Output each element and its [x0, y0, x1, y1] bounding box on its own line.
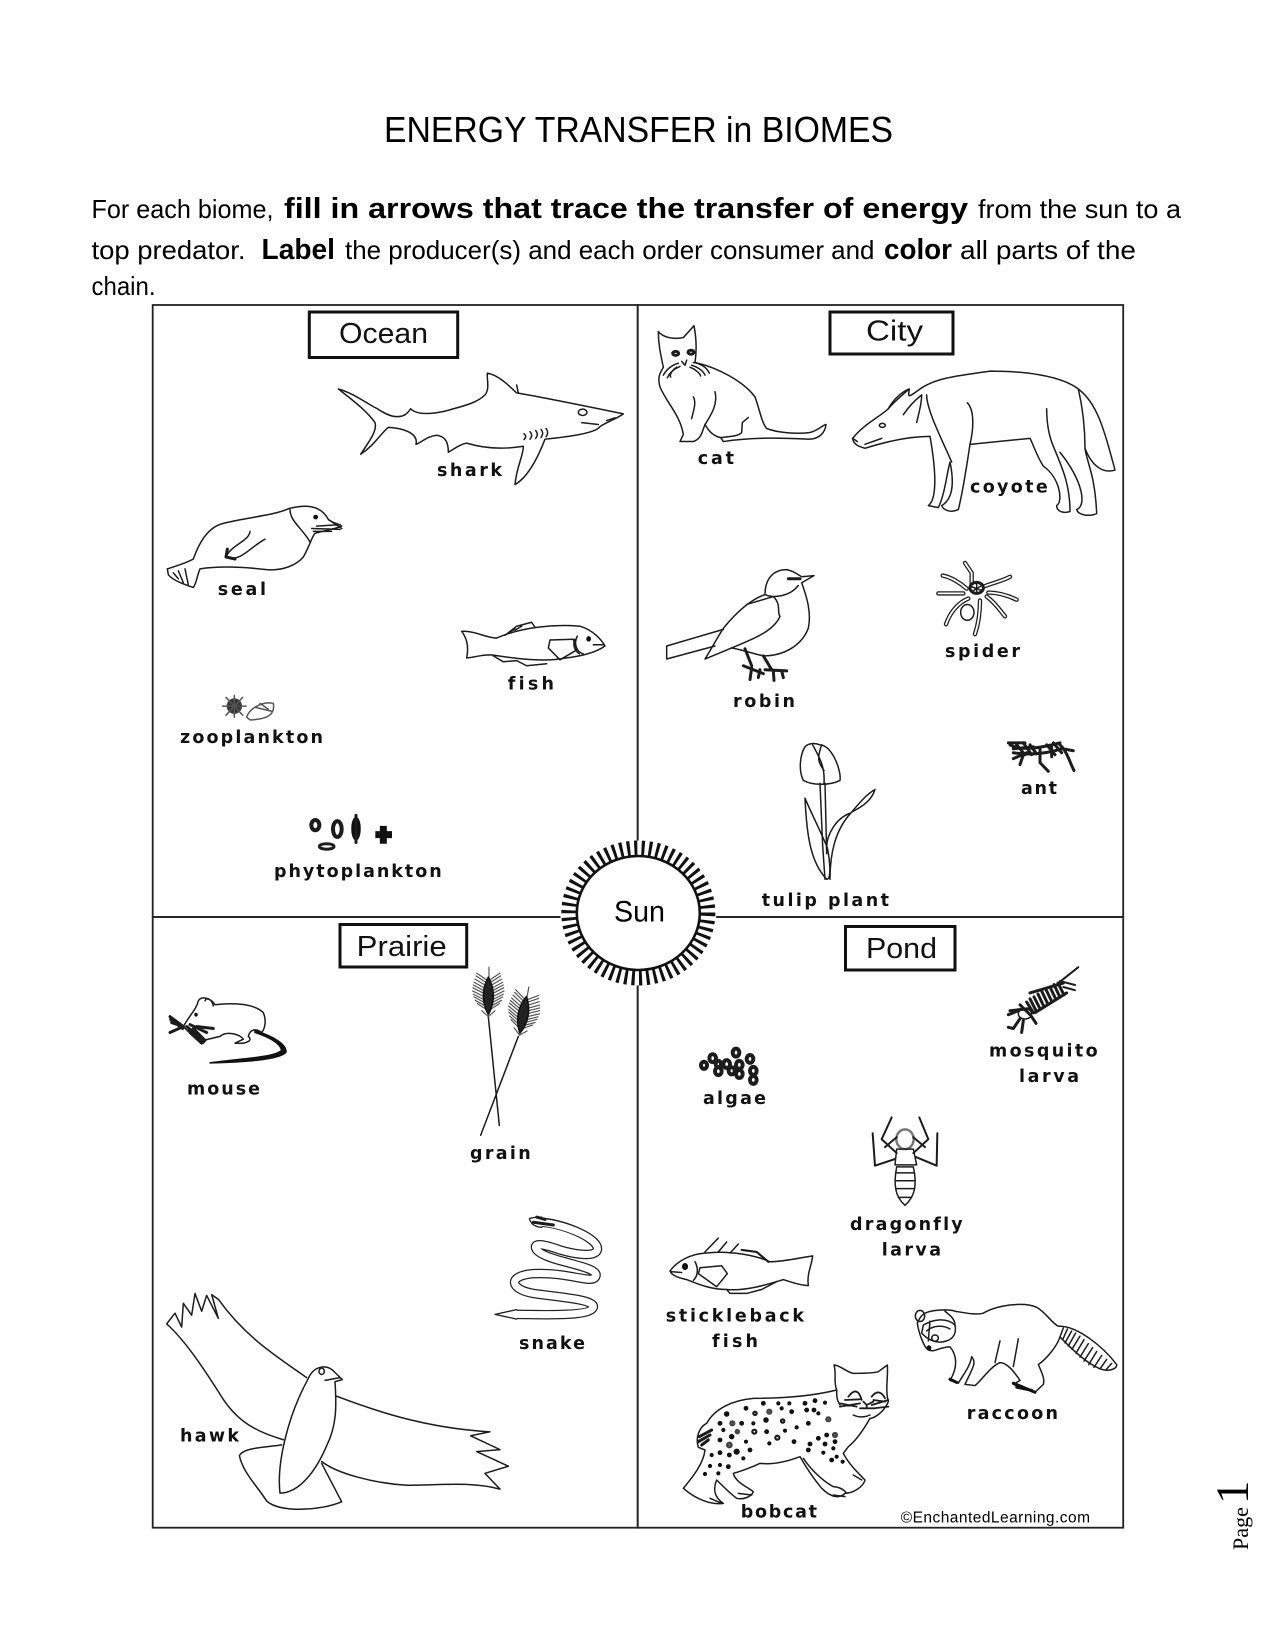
label: hawk: hawk: [180, 1427, 239, 1447]
label: dragonfly larva: larva: [882, 1240, 941, 1260]
icon: robin: [667, 570, 814, 680]
instructions text block: chain.: [92, 271, 156, 301]
icon: sun: Sun: [614, 896, 665, 928]
instructions text block: [92, 193, 1182, 301]
label: stickleback fish: stickleback: [666, 1306, 804, 1326]
icon: bobcat: [683, 1365, 888, 1504]
heading: Prairie: [340, 924, 467, 967]
label: snake: snake: [519, 1334, 585, 1354]
icon: grain: [473, 967, 544, 1135]
label: spider: spider: [945, 642, 1020, 662]
label: dragonfly larva: dragonfly: [850, 1215, 963, 1235]
icon: mosquito larva: [1008, 967, 1078, 1032]
icon: algae: [701, 1049, 757, 1084]
icon: tulip plant: [800, 744, 875, 879]
label: zooplankton: zooplankton: [180, 728, 323, 748]
icon: hawk: [167, 1293, 508, 1509]
heading: Pond: Pond: [866, 933, 937, 965]
label: phytoplankton: phytoplankton: [274, 862, 442, 882]
title: ENERGY TRANSFER in BIOMES: [384, 109, 893, 150]
label: grain: grain: [470, 1144, 531, 1164]
label: mouse: mouse: [187, 1080, 260, 1100]
label: dragonfly larva: [850, 1215, 963, 1260]
label: mosquito larva: mosquito: [989, 1042, 1098, 1062]
panel: ocean: [153, 305, 638, 917]
label: seal: seal: [218, 580, 266, 600]
instructions text block: all parts of the: [960, 235, 1136, 265]
heading: Prairie: Prairie: [357, 931, 447, 963]
label: raccoon: raccoon: [967, 1404, 1058, 1424]
icon: stickleback fish: [670, 1238, 813, 1293]
heading: Pond: [846, 926, 955, 970]
icon: coyote: [853, 371, 1115, 515]
credit: EnchantedLearning.com: ©EnchantedLearning.com: [901, 1510, 1090, 1527]
icon: phytoplankton: [311, 815, 392, 849]
label: ant: ant: [1021, 779, 1057, 799]
label: cat: cat: [698, 449, 734, 469]
icon: seal: [167, 506, 342, 587]
icon: raccoon: [915, 1304, 1117, 1392]
label: robin: robin: [733, 692, 795, 712]
instructions text block: top predator.: [92, 235, 246, 265]
icon: ant: [1008, 743, 1074, 771]
instructions text block: Label: [262, 234, 335, 266]
icon: dragonfly larva: [873, 1117, 937, 1205]
icon: shark: [338, 373, 623, 485]
instructions text block: from the sun to a: [978, 194, 1182, 224]
label: bobcat: bobcat: [741, 1502, 817, 1522]
heading: Ocean: [309, 312, 458, 358]
panel: prairie: [153, 917, 638, 1528]
heading: Ocean: Ocean: [339, 318, 428, 350]
label: mosquito larva: [989, 1042, 1098, 1087]
page number: 1: [1207, 1480, 1259, 1504]
icon: zooplankton: [223, 695, 274, 720]
instructions text block: fill in arrows that trace the transfer of energy: [284, 193, 968, 225]
icon: spider: [938, 563, 1017, 634]
icon: mouse: [170, 998, 286, 1063]
label: mosquito larva: larva: [1019, 1067, 1079, 1087]
label: fish: fish: [508, 674, 554, 694]
instructions text block: color: [884, 234, 952, 266]
icon: snake: [495, 1217, 597, 1319]
label: coyote: coyote: [970, 478, 1048, 498]
panel: city: [638, 305, 1123, 917]
heading: City: City: [866, 316, 924, 348]
page number: [1207, 1480, 1259, 1550]
label: tulip plant: tulip plant: [762, 891, 889, 911]
instructions text block: the producer(s) and each order consumer and: [345, 235, 874, 265]
instructions text block: For each biome,: [92, 194, 274, 224]
icon: fish: [462, 622, 605, 666]
icon: sun: [560, 840, 716, 986]
label: shark: shark: [437, 461, 502, 481]
page number: Page: [1228, 1507, 1253, 1550]
label: stickleback fish: [666, 1306, 804, 1352]
icon: cat: [658, 326, 826, 442]
panel: pond: [638, 917, 1123, 1528]
label: algae: algae: [703, 1089, 766, 1109]
label: stickleback fish: fish: [712, 1332, 758, 1352]
heading: City: [830, 312, 953, 354]
